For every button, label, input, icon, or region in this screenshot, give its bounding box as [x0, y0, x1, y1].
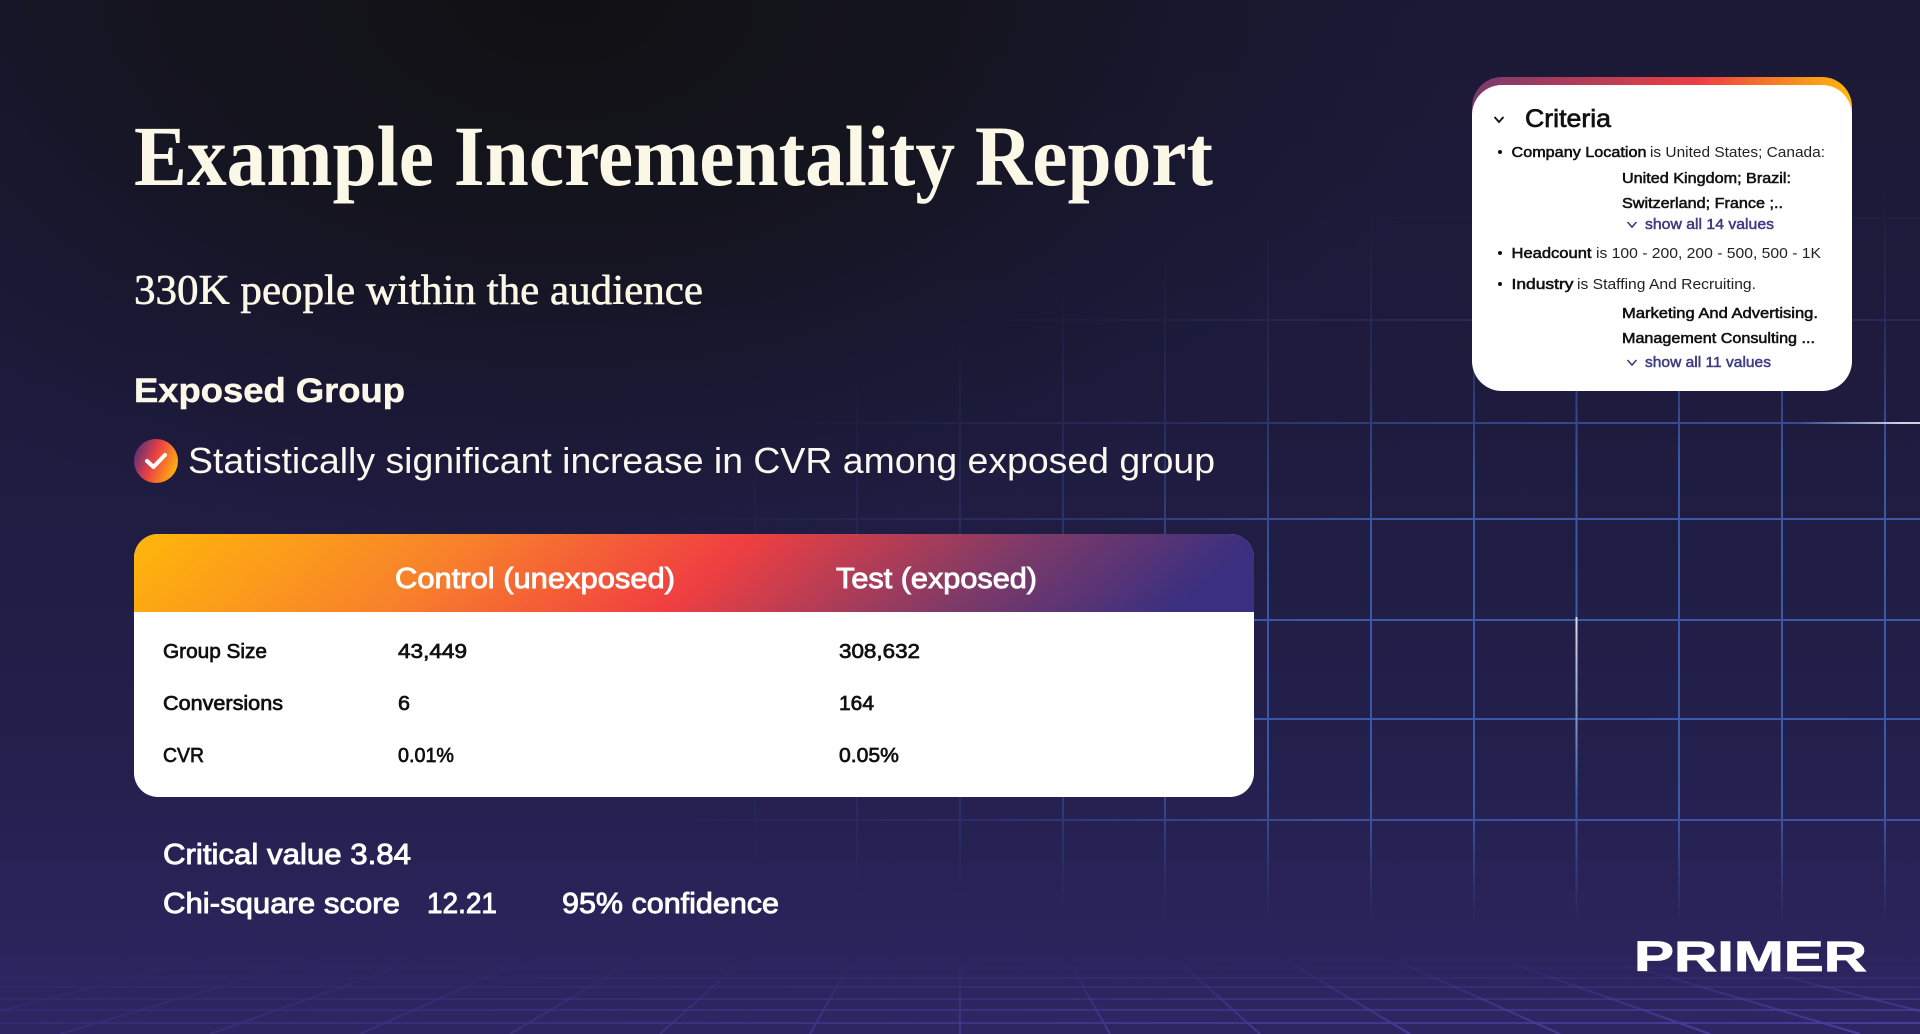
statistics summary: Critical value 3.84: [163, 839, 411, 871]
row: group size: Group Size: [163, 641, 267, 663]
panel: results table: [134, 534, 1254, 797]
row: conversions: Conversions: [163, 693, 283, 715]
criterion: industry: Industry: [1512, 276, 1574, 293]
statistics summary: 12.21: [427, 888, 497, 920]
statement text: Statistically significant increase in CVR among exposed group: [188, 440, 1215, 481]
row: group size: 308,632: [839, 641, 920, 663]
row: group size: 43,449: [398, 641, 467, 663]
table body: [134, 534, 1254, 797]
criterion: headcount: [1498, 245, 1821, 262]
criterion: company location: [1498, 144, 1825, 233]
criterion: company location: Switzerland; France ;..: [1622, 195, 1783, 212]
title: Example Incrementality Report: [134, 108, 1213, 204]
row: cvr: 0.05%: [839, 745, 899, 767]
table header: Test (exposed): [836, 563, 1037, 595]
table header: Control (unexposed): [395, 563, 675, 595]
criterion: company location: United Kingdom; Brazil:: [1622, 170, 1791, 187]
row: conversions: 164: [839, 693, 874, 715]
panel: criteria: [1472, 77, 1852, 391]
criterion: company location: is United States; Canada:: [1650, 144, 1825, 161]
statistics summary: Chi-square score: [163, 888, 400, 920]
significance statement: [134, 439, 1215, 483]
criterion: industry: show all 11 values: [1645, 354, 1771, 371]
criterion: company location: Company Location: [1512, 144, 1646, 161]
criterion: headcount: Headcount: [1512, 245, 1592, 262]
row: cvr: 0.01%: [398, 745, 454, 767]
row: cvr: [163, 745, 899, 767]
criterion: industry: Management Consulting ...: [1622, 330, 1815, 347]
icon: chevron: [1494, 117, 1504, 122]
row: group size: [163, 641, 920, 663]
icon: check badge: [134, 439, 178, 483]
logo: primer: PRIMER: [1634, 933, 1867, 981]
criteria heading: Criteria: [1525, 105, 1611, 133]
table header: [134, 534, 1254, 612]
criterion: industry: [1498, 276, 1818, 371]
heading: exposed group: Exposed Group: [134, 372, 405, 410]
row: conversions: 6: [398, 693, 410, 715]
row: conversions: [163, 693, 874, 715]
subtitle: 330K people within the audience: [134, 268, 703, 314]
statistics summary: [163, 839, 779, 920]
criterion: company location: show all 14 values: [1645, 216, 1774, 233]
statistics summary: 95% confidence: [562, 888, 779, 920]
criterion: industry: Marketing And Advertising.: [1622, 305, 1818, 322]
criterion: industry: is Staffing And Recruiting.: [1577, 276, 1756, 293]
criterion: headcount: is 100 - 200, 200 - 500, 500 - 1K: [1596, 245, 1821, 262]
row: cvr: CVR: [163, 745, 204, 767]
